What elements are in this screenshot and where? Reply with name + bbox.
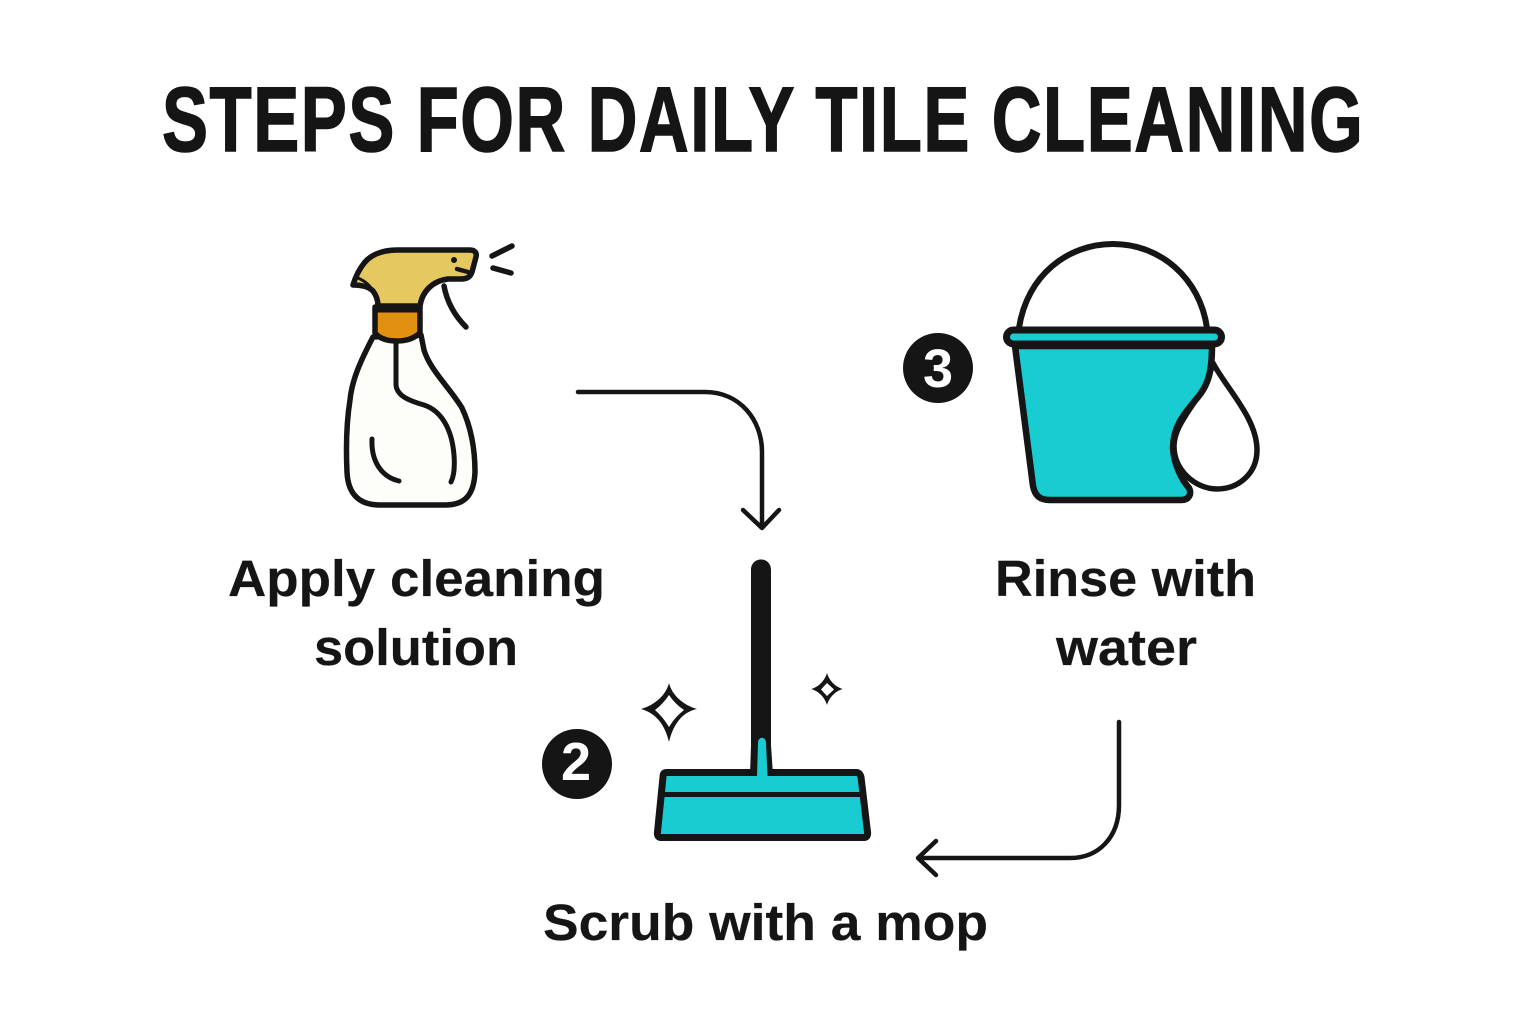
number badge 2 — [542, 729, 612, 799]
water drop — [1174, 363, 1257, 489]
step 2: mop icon — [641, 560, 868, 838]
spray lines — [492, 246, 512, 273]
step 1 label: solution — [314, 619, 518, 676]
mop head divider — [662, 792, 863, 797]
step 1: spray bottle icon — [346, 246, 512, 505]
mop neck — [757, 738, 768, 776]
step 3 label — [995, 550, 1256, 676]
step 3 label: Rinse with — [995, 550, 1256, 607]
nozzle dot and slit — [451, 257, 457, 263]
step 3: bucket icon — [1006, 244, 1257, 500]
bucket body — [1015, 346, 1212, 500]
arrow: step 3 to step 2 — [918, 722, 1119, 875]
sparkle large — [641, 683, 697, 742]
trigger lever — [444, 286, 466, 327]
mop head — [657, 772, 868, 838]
number badge 3 — [903, 333, 973, 403]
spray head — [353, 250, 476, 306]
bottle inner contour — [396, 342, 454, 482]
mop handle — [750, 560, 773, 775]
title: STEPS FOR DAILY TILE CLEANING — [162, 68, 1363, 171]
bottle body — [346, 335, 475, 505]
step 2 label: Scrub with a mop — [543, 894, 988, 951]
bucket handle — [1019, 244, 1207, 328]
arrow: step 1 to step 2 — [578, 392, 779, 528]
step 1 label: Apply cleaning — [228, 550, 605, 607]
number badge 3: 3 — [923, 339, 953, 399]
orange collar — [375, 307, 420, 341]
step 3 label: water — [1055, 619, 1197, 676]
number badge 2: 2 — [561, 732, 591, 792]
bucket rim — [1006, 330, 1222, 344]
step 1 label — [228, 550, 605, 676]
bottle highlight — [372, 439, 399, 481]
spray head tip edge — [358, 278, 376, 296]
sparkle small — [811, 673, 843, 705]
